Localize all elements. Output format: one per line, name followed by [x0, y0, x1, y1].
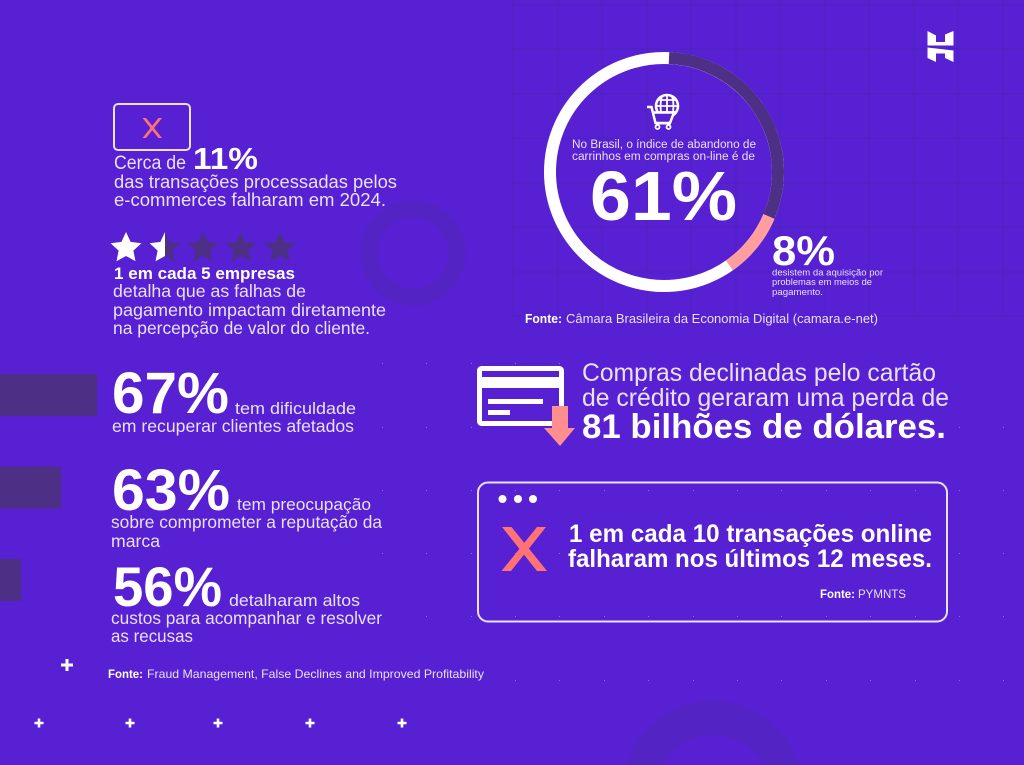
icon: shopping cart with globe — [647, 95, 678, 129]
stat: 67%: 67% — [112, 361, 229, 426]
text: 1 em cada 5 empresas: 1 em cada 5 empresas — [114, 264, 295, 283]
text: 11%: 11% — [193, 141, 258, 176]
panel: 1 em cada 10 transações — [478, 482, 947, 622]
stat: 63%: tem preocupação — [237, 495, 371, 514]
decorative arc: bottom — [627, 701, 799, 765]
icon: stars — [111, 232, 295, 261]
text: 11%: e-commerces falharam em 2024. — [114, 190, 386, 210]
stat: 63%: marca — [111, 531, 160, 551]
side bars — [0, 374, 97, 601]
stat: 67%: tem dificuldade — [235, 399, 356, 418]
source: PYMNTS — [820, 587, 906, 601]
text: 8% callout — [772, 227, 883, 297]
icon: window with X — [114, 104, 190, 150]
stat: 67% — [112, 361, 356, 436]
logo: Hostinger H — [928, 31, 954, 62]
source: Câmara Brasileira: Câmara Brasileira da Economia Digital (camara.e-net) — [566, 312, 878, 326]
text: 8% callout: pagamento. — [772, 287, 823, 297]
text: 8% callout: 8% — [772, 227, 835, 274]
decorative ring: left — [369, 209, 457, 297]
plus marks — [34, 659, 407, 728]
text: 1 em cada 5 empresas: detalha que as falhas de — [113, 281, 306, 301]
source: PYMNTS: Fonte: — [820, 587, 855, 601]
text: 81 bilhões de dólares: Compras declinadas pelo cartão — [582, 359, 936, 387]
text: 1 em cada 5 empresas — [113, 264, 386, 338]
text: 8% callout: desistem da aquisição por — [772, 268, 883, 278]
text: 8% callout: problemas em meios de — [772, 277, 872, 287]
text: 1 em cada 5 empresas: pagamento impactam diretamente — [113, 300, 386, 320]
stat: 56%: as recusas — [111, 626, 193, 646]
stat: 56%: custos para acompanhar e resolver — [111, 608, 382, 628]
text: 61% callout: 61% — [590, 157, 737, 235]
text: 61% callout: No Brasil, o índice de abandono de — [572, 139, 756, 151]
text: transactions statement: falharam nos últimos 12 meses. — [568, 545, 932, 573]
text: transactions statement — [568, 520, 932, 573]
icon: window dots — [498, 495, 537, 503]
source: Câmara Brasileira: Fonte: — [525, 312, 562, 326]
text: 61% callout — [572, 139, 756, 235]
source: left column: Fraud Management, False Declines and Improved Profitability — [147, 667, 484, 681]
panel: 11% statistic — [114, 104, 397, 210]
text: 81 bilhões de dólares: 81 bilhões de dólares. — [582, 408, 946, 446]
icon: credit card with down arrow — [480, 368, 575, 446]
text: 81 bilhões de dólares: de crédito geraram uma perda de — [582, 384, 949, 412]
stat: 63%: 63% — [112, 458, 230, 523]
stat: 63% — [111, 458, 382, 551]
panel: star rating statistic — [111, 232, 386, 338]
text: 1 em cada 5 empresas: na percepção de valor do cliente. — [113, 318, 370, 338]
text: transactions statement: 1 em cada 10 transações online — [569, 520, 932, 548]
donut chart: 61% cart abandonment — [550, 58, 778, 286]
text: 81 bilhões de dólares — [582, 359, 949, 446]
stat: 56%: detalharam altos — [229, 591, 360, 610]
stat: 63%: sobre comprometer a reputação da — [111, 512, 382, 532]
text: 11%: das transações processadas pelos — [114, 172, 397, 192]
text: 61% callout: carrinhos em compras on-line é de — [572, 151, 755, 163]
text: 11%: Cerca de — [114, 153, 186, 174]
icon: large X — [502, 527, 547, 571]
arrow: down — [544, 406, 575, 446]
source: PYMNTS: PYMNTS — [858, 587, 906, 601]
stat: 56% — [111, 555, 382, 646]
text: 11% — [114, 141, 397, 210]
source: left column: Fonte: — [108, 667, 143, 681]
stat: 67%: em recuperar clientes afetados — [112, 416, 354, 436]
stat: 56%: 56% — [113, 555, 222, 618]
